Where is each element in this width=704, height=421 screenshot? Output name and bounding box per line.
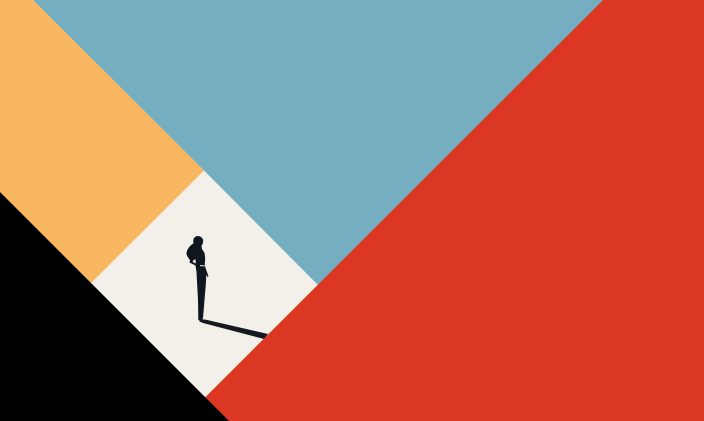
- panel: cream centre diamond: [91, 170, 319, 398]
- panel: red plane: [205, 0, 704, 421]
- waist gap: [200, 265, 205, 266]
- hip gap: [192, 259, 196, 264]
- figure shadow: [199, 320, 268, 339]
- panel: orange plane: [0, 0, 204, 283]
- icon: standing woman silhouette: [186, 236, 208, 320]
- panel: blue plane: [33, 0, 606, 286]
- panel: black plane: [0, 192, 229, 421]
